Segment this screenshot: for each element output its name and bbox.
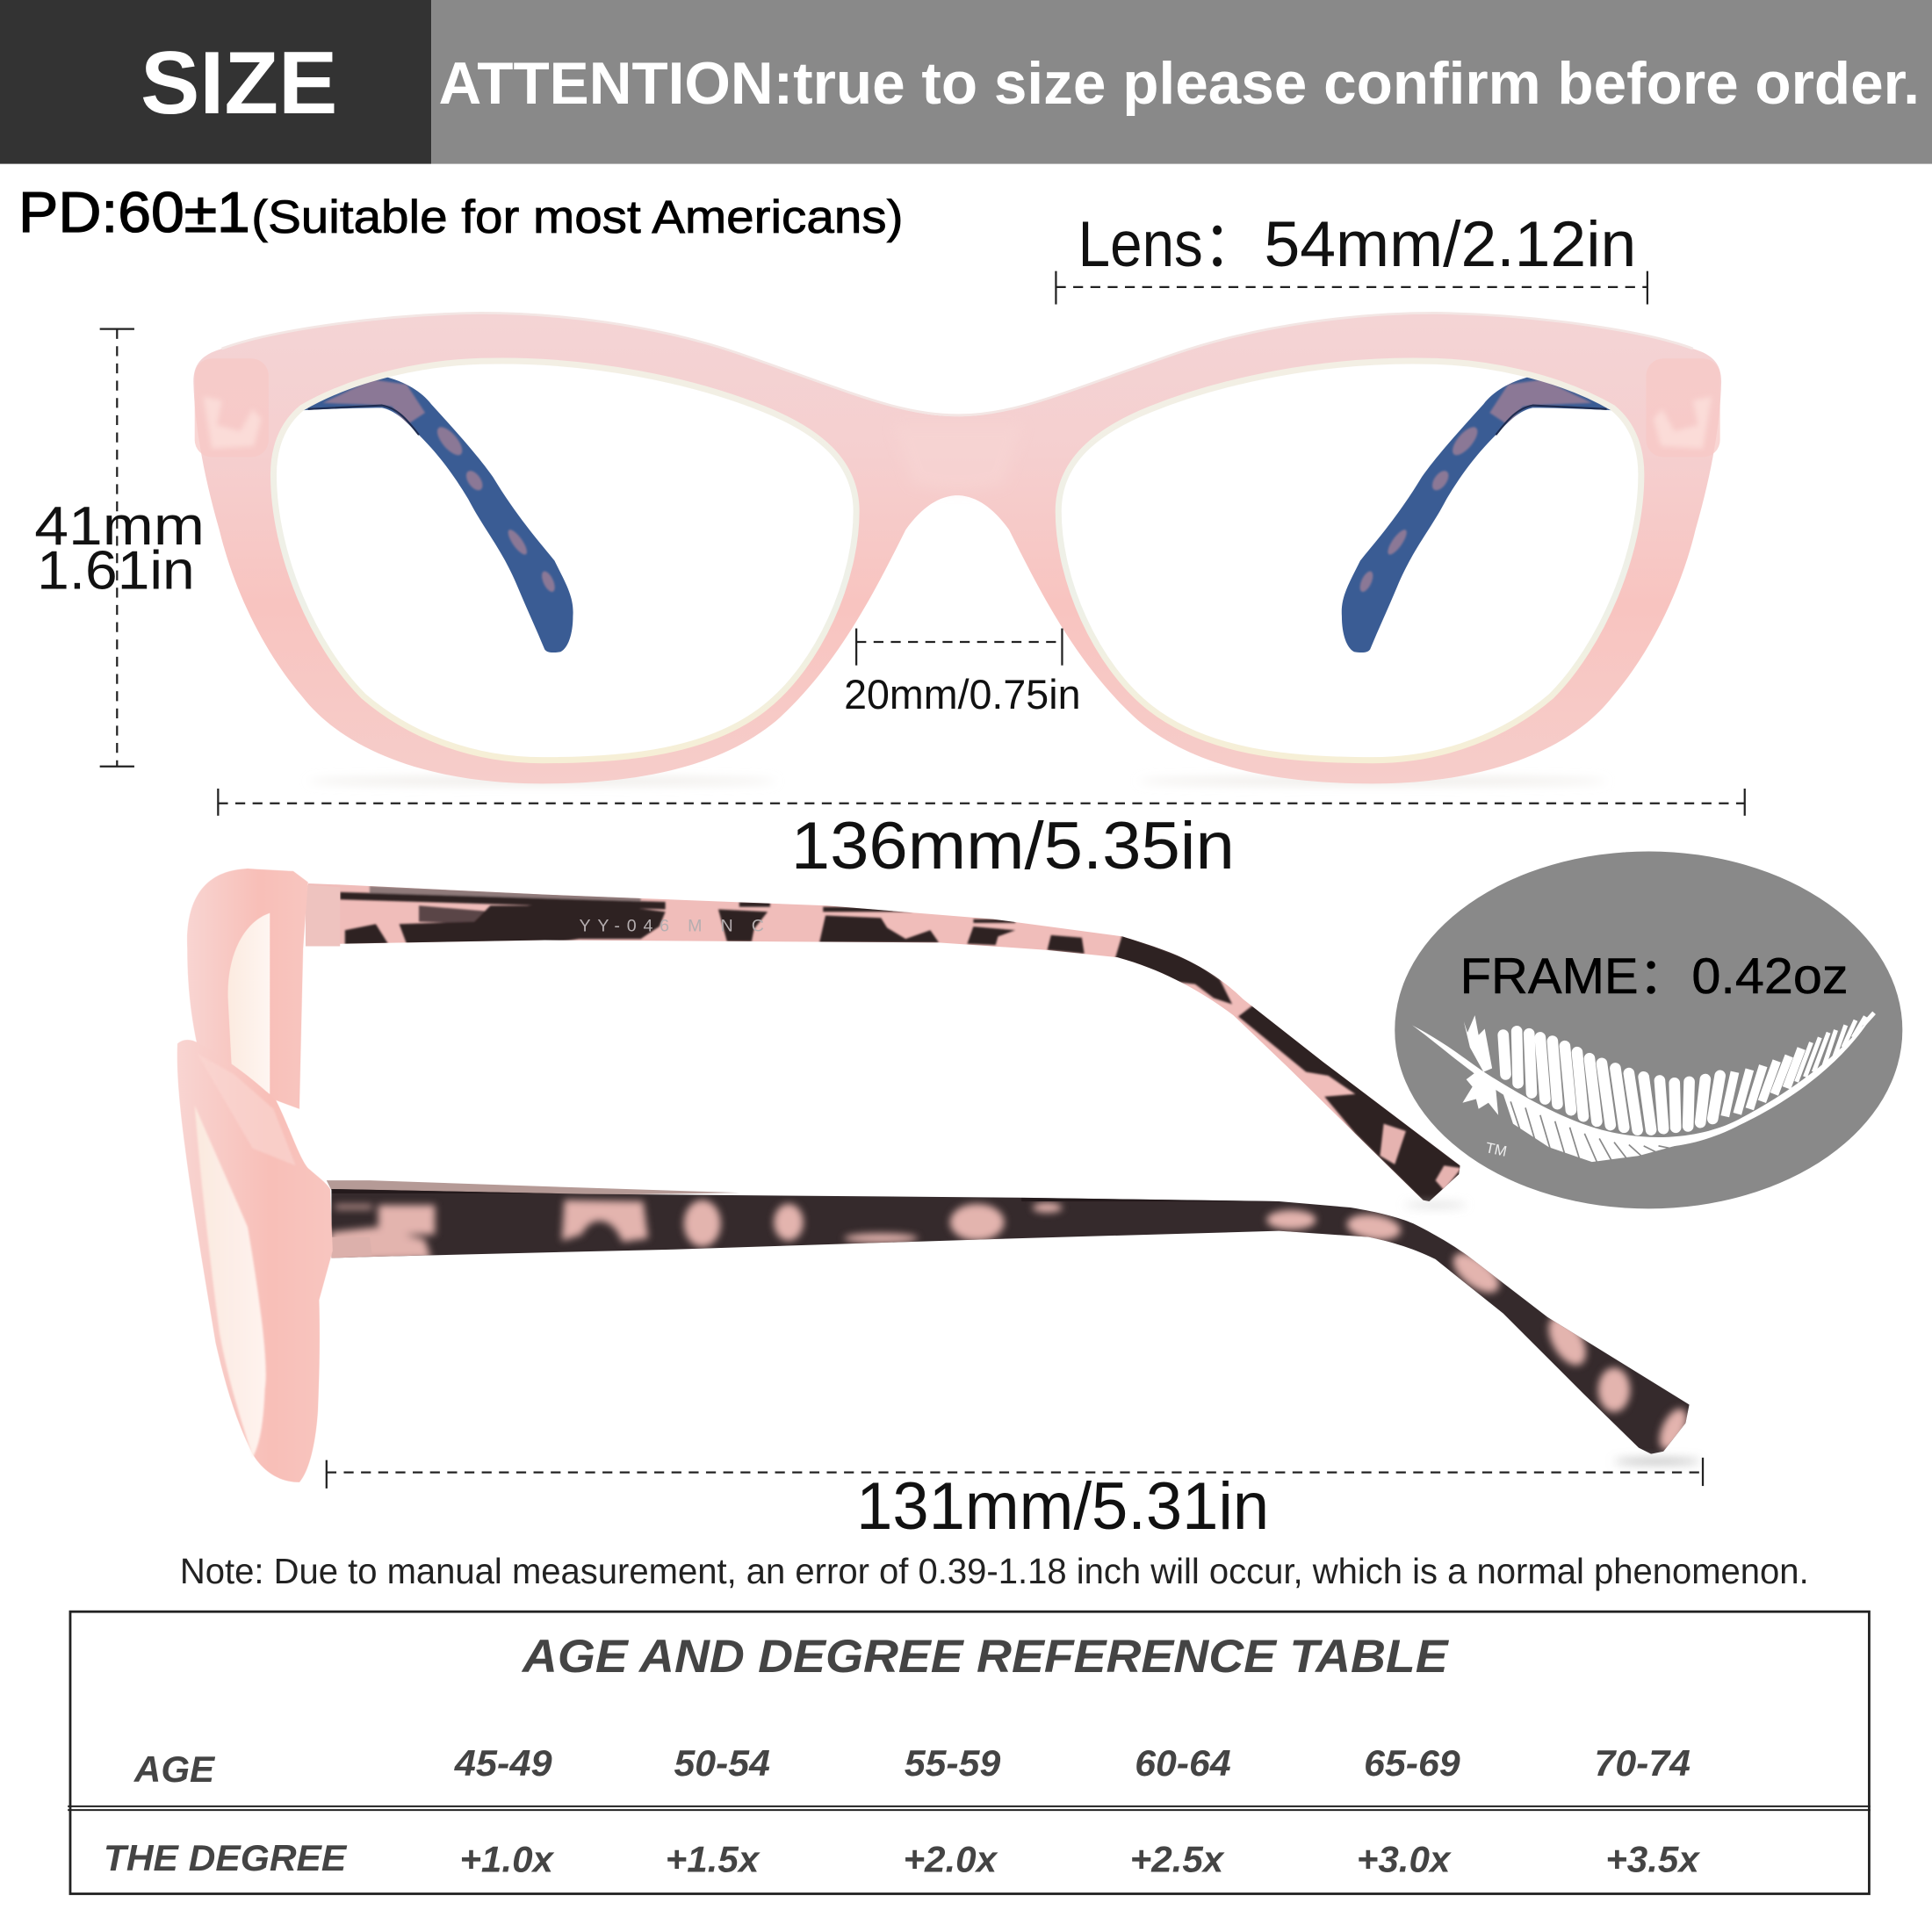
near frame front edge [177,1040,333,1482]
degree row: +1.5x [666,1838,761,1879]
table title: AGE AND DEGREE REFERENCE TABLE [521,1631,1449,1683]
left lens rim [193,313,959,783]
temple hinge metal [306,884,340,947]
degree row: +3.5x [1605,1838,1700,1879]
age row: 55-59 [905,1742,1001,1784]
icon: feather [1412,1013,1874,1162]
dimension: lens height: 1.61in [37,541,195,602]
age row: AGE [133,1748,216,1790]
bridge sheen [893,425,1023,490]
temple model print: YY-046 M N C [579,917,764,936]
temple metal strip [327,1180,739,1195]
degree row: +2.5x [1130,1838,1225,1879]
age row: 50-54 [674,1742,770,1784]
dimension: bridge width: 20mm/0.75in [844,672,1080,718]
degree row [104,1837,1700,1879]
frame weight label: 0.42oz [1691,948,1849,1005]
left temple seen through lens [302,376,573,652]
left inner rim [273,361,856,761]
frame weight label [1460,948,1849,1005]
age row [133,1742,1690,1790]
dimension: lens height [34,329,205,767]
measurement note: Note: Due to manual measurement, an error of 0.39-1.18 inch will occur, which is a normal phenomenon. [180,1551,1809,1591]
temple tip shadow [1614,1459,1700,1464]
glasses side view [177,862,1700,1482]
top highlight [222,313,1693,415]
degree row: +1.0x [459,1838,555,1879]
floor shadow [308,777,776,785]
age row: 60-64 [1135,1742,1231,1784]
header: attention notice: ATTENTION:true to size please confirm before order. [438,51,1920,117]
PD note: (Suitable for most Americans) [251,191,903,243]
PD note: PD:60±1 [18,181,250,244]
header: SIZE block: SIZE [141,34,337,133]
front temple [321,1171,1700,1467]
dimension: temple length: 131mm/5.31in [856,1469,1269,1544]
back temple [306,883,1460,1201]
PD note [18,181,903,244]
header: SIZE block [0,0,431,164]
right hinge [1646,358,1720,458]
table frame [70,1611,1869,1894]
age row: 70-74 [1595,1742,1690,1784]
degree row: +2.0x [903,1838,998,1879]
weight badge [1395,852,1902,1208]
dimension: lens width [1056,209,1647,305]
glasses front view [193,313,1721,785]
age and degree table [68,1611,1871,1894]
age row: 45-49 [454,1742,552,1784]
frame weight label: FRAME： [1460,948,1690,1005]
right lens rim [956,313,1721,783]
right temple seen through lens [1342,376,1613,652]
left hinge [195,358,269,458]
age row: 65-69 [1364,1742,1460,1784]
dimension: frame width: 136mm/5.35in [791,809,1235,883]
dimension: lens width: Lens： [1078,209,1260,280]
degree row: +3.0x [1357,1838,1452,1879]
right inner rim [1058,361,1641,761]
dimension: lens height: 41mm [34,496,205,557]
table divider [68,1806,1871,1810]
upper temple tip shadow [1404,1203,1467,1207]
header banner [0,0,1932,164]
trademark: TM [1484,1139,1509,1160]
degree row: THE DEGREE [104,1837,348,1878]
dimension: lens width: 54mm/2.12in [1265,209,1636,280]
back frame front edge [187,869,308,1109]
hinge plate [331,1237,372,1258]
header: attention notice [431,0,1932,164]
